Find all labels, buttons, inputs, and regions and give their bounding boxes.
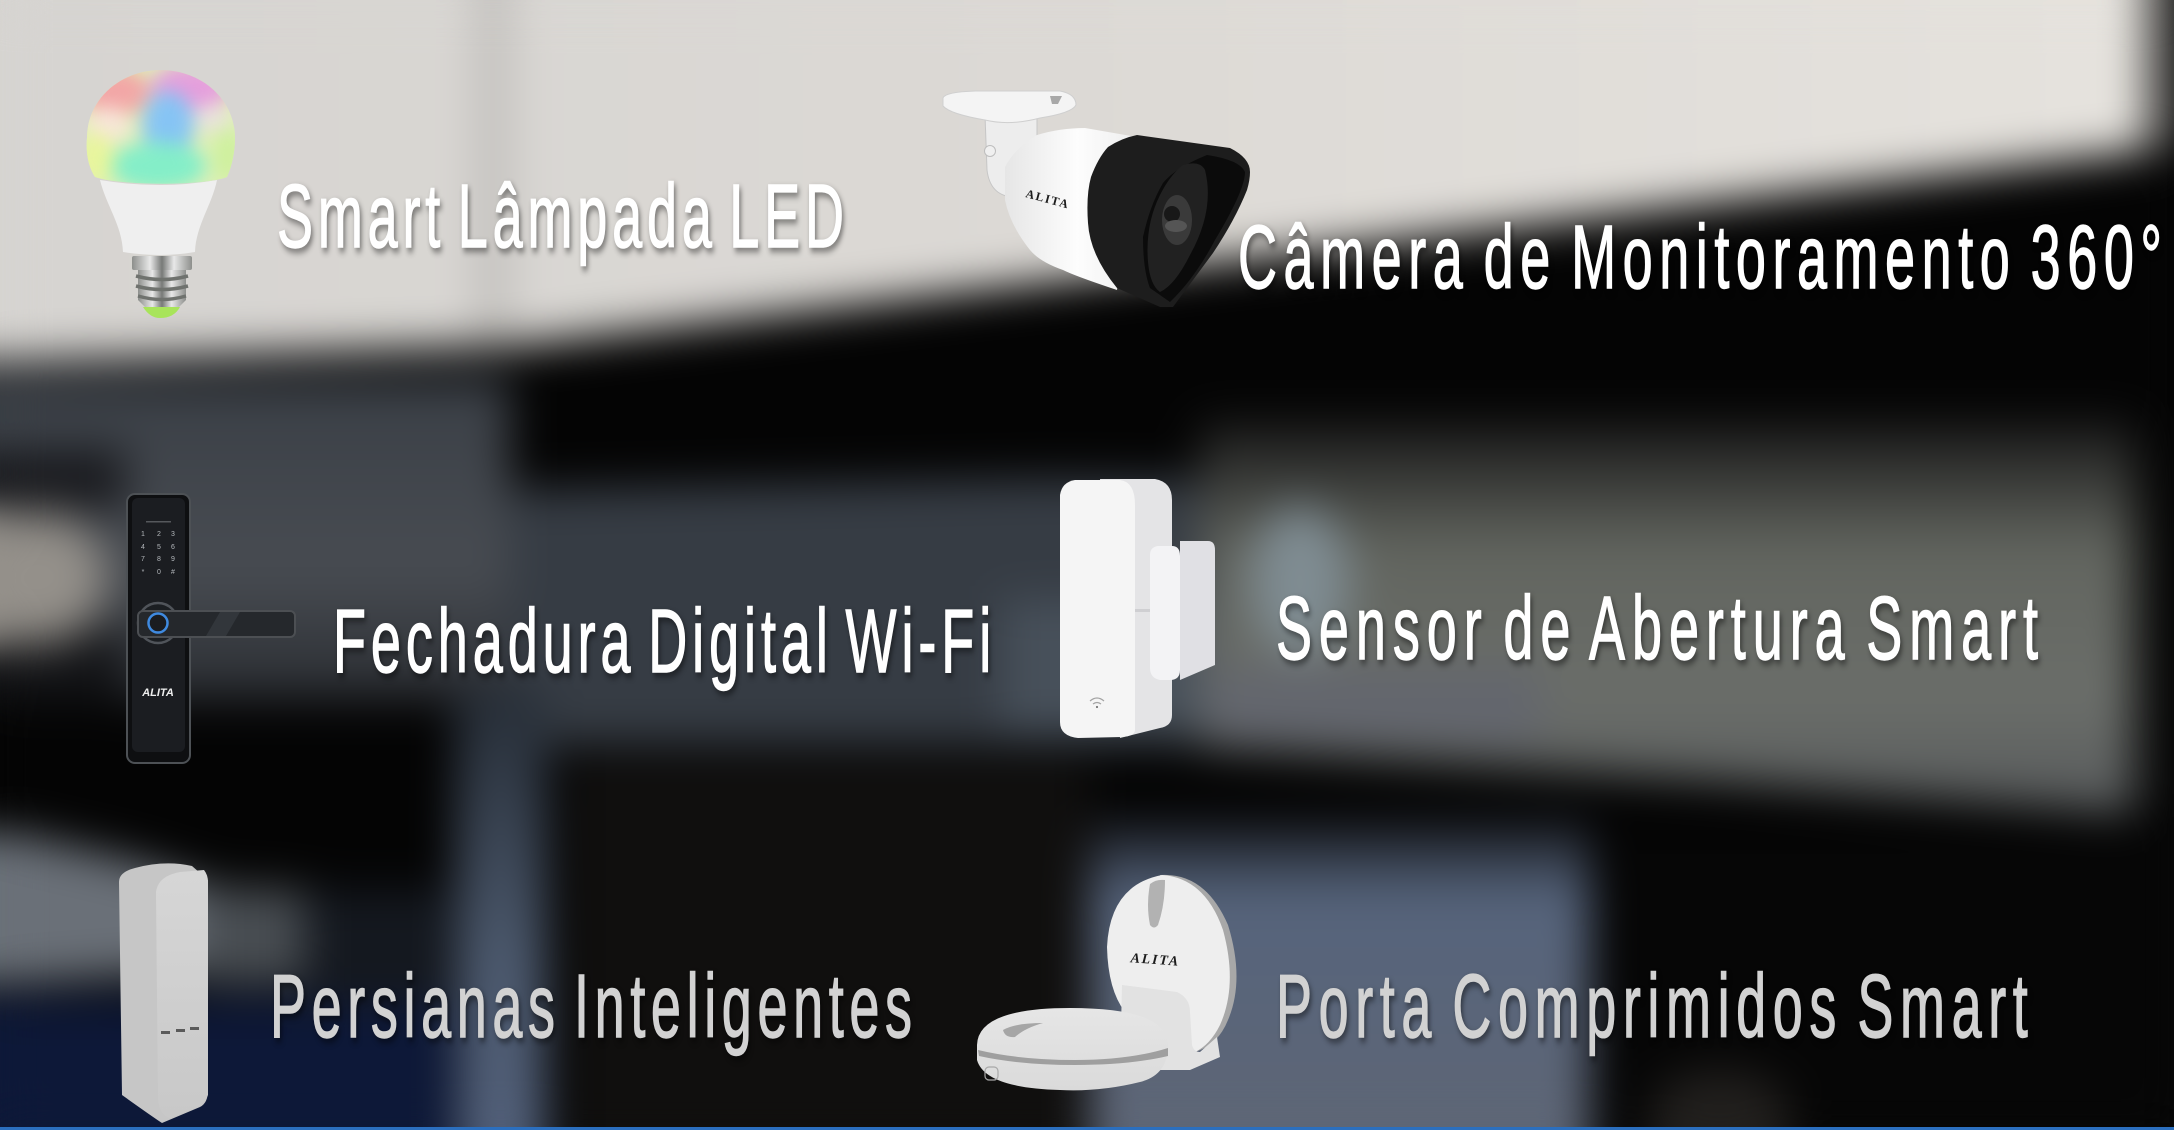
icon: digital door lock	[127, 494, 295, 763]
icon: digital door lock: ALITA	[141, 687, 174, 699]
icon: smart blinds motor	[119, 863, 208, 1123]
icon: digital door lock: 3	[171, 531, 175, 538]
icon: smart pill dispenser	[977, 875, 1236, 1090]
bottom blue line	[0, 1127, 2174, 1130]
icon: digital door lock: 7	[141, 556, 145, 563]
icon: digital door lock: #	[171, 569, 175, 576]
icon: security camera	[943, 91, 1250, 307]
label: Persianas Inteligentes: Persianas Inteligentes	[270, 956, 912, 1056]
icon: digital door lock: 5	[157, 544, 161, 551]
icon: digital door lock: 4	[141, 544, 145, 551]
icon: security camera: ALITA	[1024, 186, 1071, 212]
label: Smart Lâmpada LED: Smart Lâmpada LED	[277, 166, 844, 266]
icon: digital door lock: 8	[157, 556, 161, 563]
icon: digital door lock: *	[142, 569, 145, 576]
icon: digital door lock: 0	[157, 569, 161, 576]
label: Porta Comprimidos Smart: Porta Comprimidos Smart	[1276, 956, 2028, 1056]
icon: digital door lock: 1	[141, 531, 145, 538]
icon: door opening sensor	[1060, 479, 1215, 738]
icon: smart LED bulb	[86, 70, 235, 318]
icon: digital door lock: 9	[171, 556, 175, 563]
icon: smart pill dispenser: ALITA	[1129, 951, 1180, 970]
label: Sensor de Abertura Smart: Sensor de Abertura Smart	[1276, 578, 2038, 678]
icon: digital door lock: 6	[171, 544, 175, 551]
label: Câmera de Monitoramento 360°: Câmera de Monitoramento 360°	[1238, 207, 2162, 307]
icon: digital door lock: 2	[157, 531, 161, 538]
label: Fechadura Digital Wi-Fi: Fechadura Digital Wi-Fi	[333, 591, 991, 691]
